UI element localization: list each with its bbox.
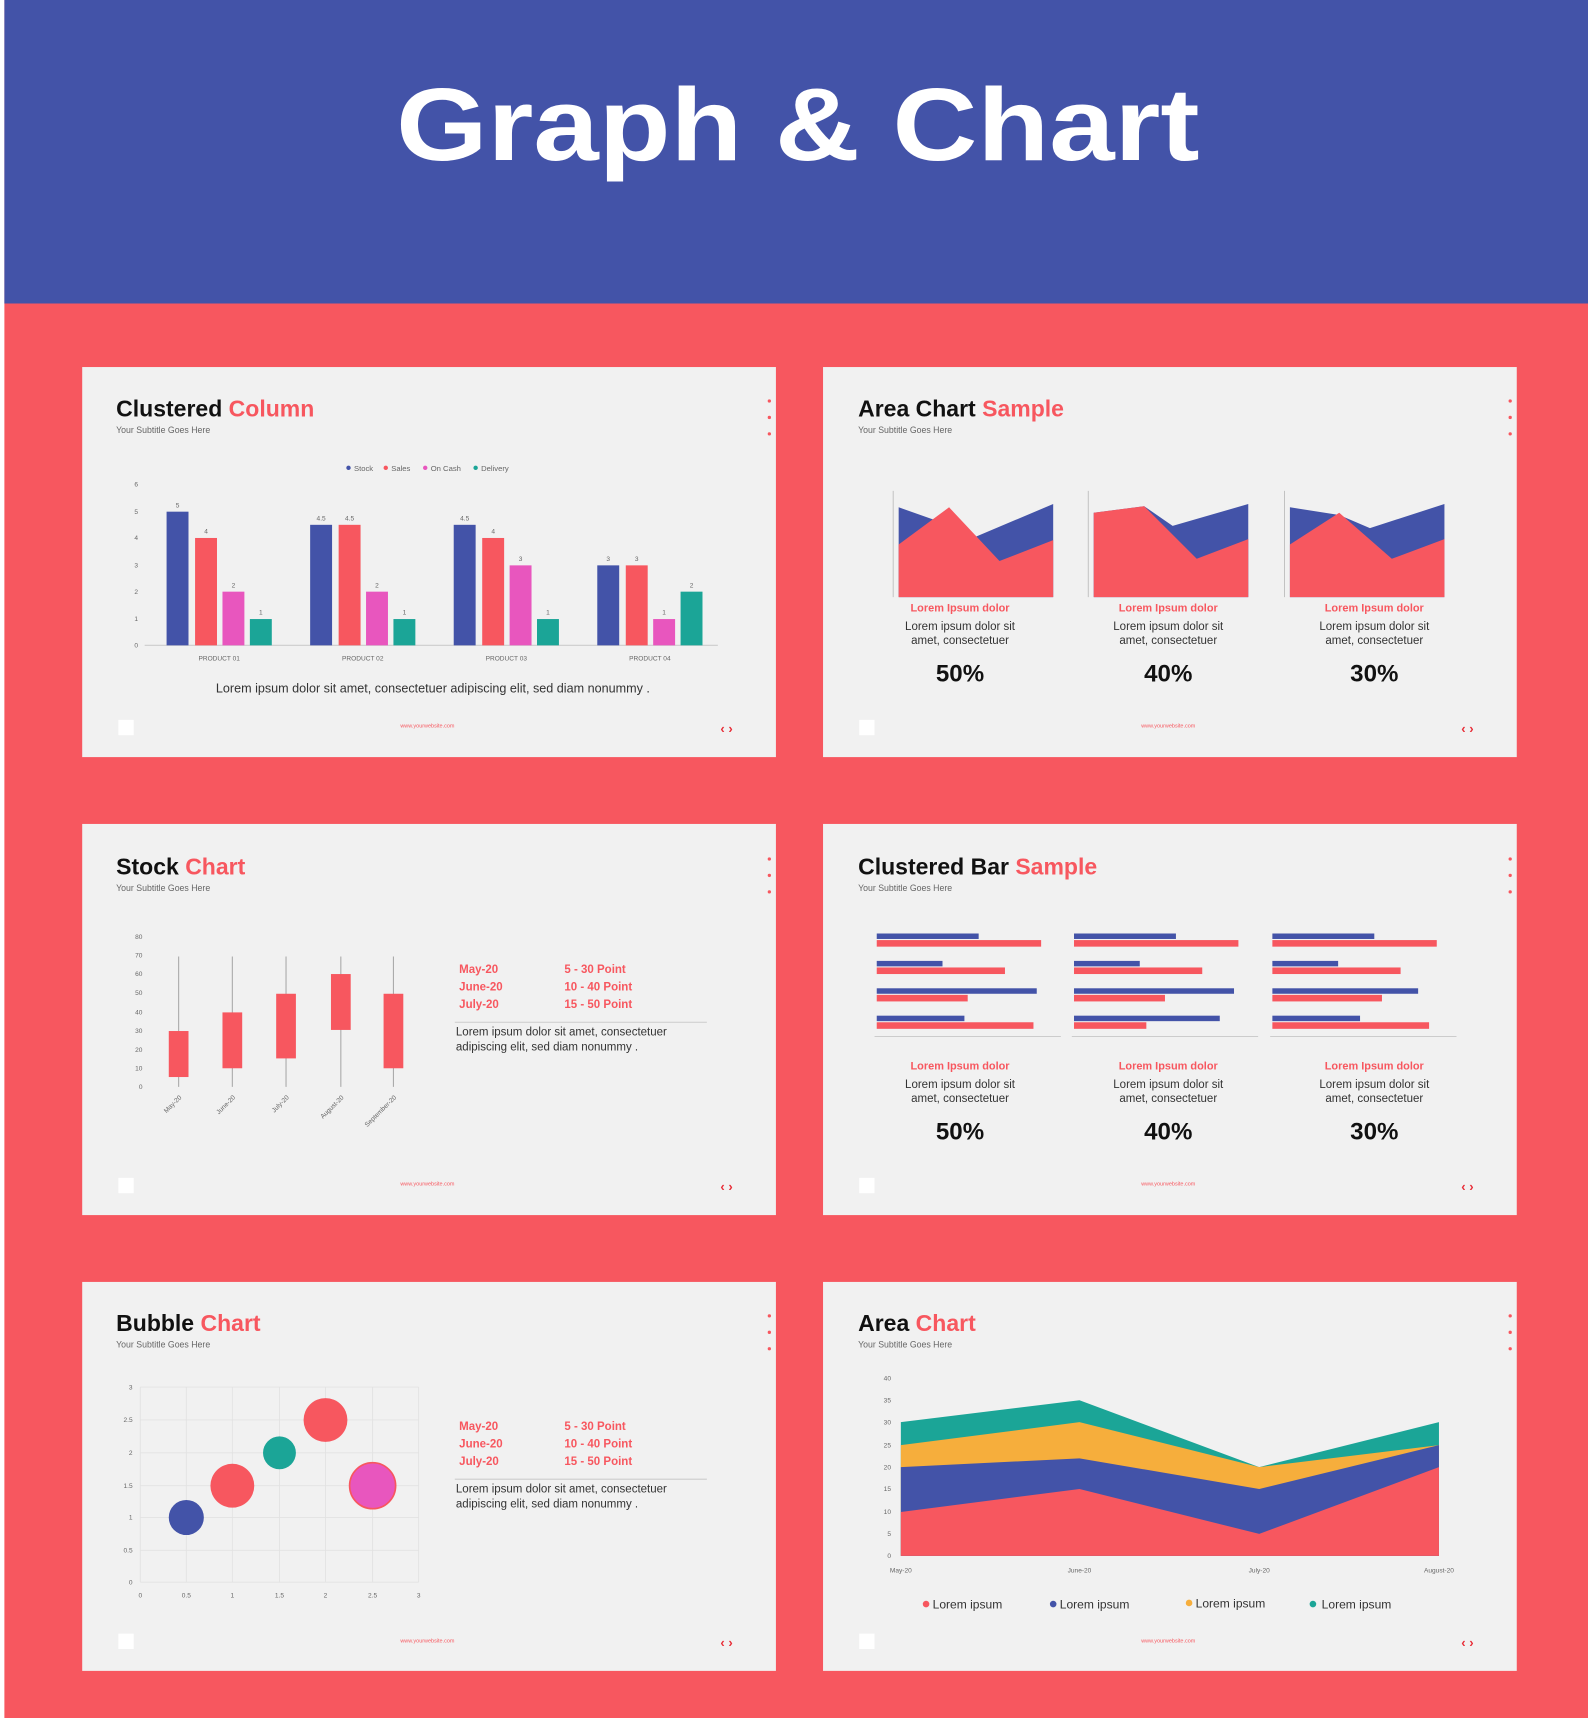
stats: amet, consectetuer (911, 635, 1009, 647)
bar chart: 5 (176, 502, 180, 509)
footer: www.yourwebsite.com (399, 1182, 455, 1188)
panel: bubble chart: Your Subtitle Goes Here (116, 1340, 210, 1350)
stacked area chart: 30 (884, 1419, 891, 1426)
heading: Clustered Column (116, 395, 314, 421)
candlestick chart: 80 (135, 934, 143, 941)
stacked area chart: 35 (884, 1397, 891, 1404)
bubble plot: 2 (129, 1450, 133, 1457)
bubble plot: 1 (129, 1515, 133, 1522)
data notes: 15 - 50 Point (564, 999, 632, 1011)
candlestick chart: 0 (139, 1084, 143, 1091)
stacked area chart: 40 (884, 1376, 891, 1383)
bar charts (875, 934, 1456, 1036)
stats: Lorem Ipsum dolor (1119, 602, 1219, 614)
stacked area chart: May-20 (890, 1567, 912, 1574)
footer: www.yourwebsite.com (1140, 1638, 1196, 1644)
data notes: July-20 (459, 1456, 499, 1468)
data notes: June-20 (459, 1438, 503, 1450)
candlestick chart: 60 (135, 971, 143, 978)
stats: amet, consectetuer (1325, 635, 1423, 647)
data notes (459, 964, 632, 1011)
legend: Lorem ipsum (1060, 1597, 1129, 1611)
stats: amet, consectetuer (1119, 1093, 1217, 1105)
stats (905, 1060, 1430, 1145)
data notes: 10 - 40 Point (564, 981, 632, 993)
description: Lorem ipsum dolor sit amet, consectetuer (456, 1026, 667, 1038)
bar chart: 1 (134, 616, 138, 623)
stats: Lorem ipsum dolor sit (905, 621, 1016, 633)
candlestick chart: 50 (135, 990, 143, 997)
description: adipiscing elit, sed diam nonummy . (456, 1499, 638, 1511)
bubble plot: 3 (129, 1384, 133, 1391)
candlestick chart: June-20 (215, 1094, 237, 1116)
legend: Lorem ipsum (1196, 1596, 1265, 1610)
bubble plot: 1.5 (275, 1592, 284, 1599)
bar chart (134, 481, 718, 663)
bar chart: 3 (519, 556, 523, 563)
data notes: May-20 (459, 964, 498, 976)
bar chart: 2 (134, 589, 138, 596)
mini area charts (893, 491, 1444, 597)
heading: Clustered Bar Sample (858, 853, 1097, 879)
bubble plot: 2.5 (123, 1417, 133, 1424)
legend: Sales (391, 464, 411, 473)
bar chart: 4 (204, 529, 208, 536)
stats: Lorem Ipsum dolor (910, 602, 1010, 614)
footer (859, 399, 1512, 736)
data notes: June-20 (459, 981, 503, 993)
data notes: 10 - 40 Point (564, 1438, 632, 1450)
footer: www.yourwebsite.com (399, 1638, 455, 1644)
candlestick chart: 20 (135, 1047, 143, 1054)
footer: ‹ › (1461, 1179, 1474, 1194)
footer (859, 1314, 1512, 1650)
footer: www.yourwebsite.com (1140, 1182, 1196, 1188)
stats: 50% (936, 1118, 984, 1145)
bar chart: PRODUCT 02 (342, 656, 384, 663)
panel: clustered bar sample: Your Subtitle Goes Here (858, 883, 952, 893)
description: Lorem ipsum dolor sit amet, consectetuer (456, 1483, 667, 1495)
bar chart: PRODUCT 03 (486, 656, 527, 663)
stats: amet, consectetuer (911, 1093, 1009, 1105)
stats: 30% (1350, 1118, 1398, 1145)
stats: Lorem ipsum dolor sit (1113, 621, 1224, 633)
caption: Lorem ipsum dolor sit amet, consectetuer adipiscing elit, sed diam nonummy . (216, 681, 650, 695)
bar chart: PRODUCT 01 (198, 656, 240, 663)
candlestick chart: July-20 (271, 1094, 291, 1114)
candlestick chart (135, 934, 403, 1129)
stats: 40% (1144, 1118, 1192, 1145)
stats: amet, consectetuer (1119, 635, 1217, 647)
stats: amet, consectetuer (1325, 1093, 1423, 1105)
footer (118, 857, 771, 1194)
bar chart: 4 (134, 535, 138, 542)
bubble plot: 3 (417, 1592, 421, 1599)
bubble plot: 2.5 (368, 1592, 378, 1599)
heading: Stock Chart (116, 853, 246, 879)
legend: On Cash (431, 464, 461, 473)
panel: clustered bar sample (823, 824, 1517, 1215)
bar chart: 5 (134, 509, 138, 516)
footer (118, 399, 771, 736)
header banner (4, 0, 1588, 303)
panel: area chart: Your Subtitle Goes Here (858, 1340, 952, 1350)
bar chart: 0 (134, 643, 138, 650)
title: Graph & Chart (396, 67, 1199, 182)
stats: Lorem Ipsum dolor (910, 1060, 1010, 1072)
footer: ‹ › (720, 721, 733, 736)
stats: Lorem ipsum dolor sit (1113, 1079, 1224, 1091)
data notes: 5 - 30 Point (564, 1421, 626, 1433)
stats: Lorem ipsum dolor sit (1319, 621, 1430, 633)
legend: Lorem ipsum (933, 1597, 1002, 1611)
bubble plot: 0 (138, 1592, 142, 1599)
stats: Lorem Ipsum dolor (1325, 1060, 1425, 1072)
stacked area chart: 15 (884, 1486, 891, 1493)
stats: 50% (936, 661, 984, 688)
footer: www.yourwebsite.com (1140, 724, 1196, 730)
bubble plot: 2 (324, 1592, 328, 1599)
legend: Lorem ipsum (1322, 1597, 1391, 1611)
legend (923, 1596, 1391, 1611)
footer: www.yourwebsite.com (399, 724, 455, 730)
heading: Area Chart (858, 1310, 976, 1336)
candlestick chart: 70 (135, 953, 143, 960)
bar chart: 2 (375, 582, 379, 589)
bubble plot: 1.5 (123, 1483, 133, 1490)
legend: Stock (354, 464, 373, 473)
bubble plot: 1 (231, 1592, 235, 1599)
candlestick chart: 30 (135, 1028, 143, 1035)
footer: ‹ › (1461, 721, 1474, 736)
data notes: May-20 (459, 1421, 498, 1433)
bar chart: 4.5 (345, 515, 355, 522)
panel: stock chart: Your Subtitle Goes Here (116, 883, 210, 893)
stacked area chart (884, 1376, 1454, 1574)
data notes (459, 1421, 632, 1468)
panel: bubble chart (82, 1282, 776, 1671)
candlestick chart: 40 (135, 1010, 143, 1017)
panel: clustered column (82, 367, 776, 757)
bar chart: 1 (259, 610, 263, 617)
bar chart: 6 (134, 481, 138, 488)
panel: clustered column: Your Subtitle Goes Here (116, 425, 210, 435)
candlestick chart: August-20 (319, 1094, 346, 1120)
stats: Lorem ipsum dolor sit (905, 1079, 1016, 1091)
footer: ‹ › (1461, 1635, 1474, 1650)
data notes: 5 - 30 Point (564, 964, 626, 976)
panel: area chart (823, 1282, 1517, 1671)
bar chart: 1 (546, 610, 550, 617)
bar chart: 1 (403, 610, 407, 617)
panel: stock chart (82, 824, 776, 1215)
description (456, 1026, 667, 1054)
bar chart: 4.5 (460, 515, 470, 522)
footer (859, 857, 1512, 1194)
stats: 30% (1350, 661, 1398, 688)
panel: area chart sample (823, 367, 1517, 757)
footer: ‹ › (720, 1635, 733, 1650)
bar chart: PRODUCT 04 (629, 656, 671, 663)
bubble plot: 0 (129, 1579, 133, 1586)
bar chart: 2 (232, 582, 236, 589)
description: adipiscing elit, sed diam nonummy . (456, 1042, 638, 1054)
stacked area chart: August-20 (1424, 1567, 1454, 1574)
bubble plot (123, 1384, 421, 1599)
footer: ‹ › (720, 1179, 733, 1194)
candlestick chart: 10 (135, 1065, 143, 1072)
bar chart: 3 (134, 563, 138, 570)
stacked area chart: July-20 (1249, 1567, 1270, 1574)
bar chart: 3 (635, 556, 639, 563)
bubble plot: 0.5 (182, 1592, 191, 1599)
stacked area chart: 25 (884, 1442, 891, 1449)
heading: Area Chart Sample (858, 395, 1064, 421)
data notes: July-20 (459, 999, 499, 1011)
bar chart: 4.5 (317, 515, 326, 522)
data notes: 15 - 50 Point (564, 1456, 632, 1468)
panel: area chart sample: Your Subtitle Goes Here (858, 425, 952, 435)
legend (346, 464, 509, 473)
stats: Lorem Ipsum dolor (1325, 602, 1425, 614)
footer (118, 1314, 771, 1650)
candlestick chart: September-20 (364, 1094, 398, 1129)
bar chart: 2 (690, 582, 694, 589)
heading: Bubble Chart (116, 1310, 261, 1336)
stats: 40% (1144, 661, 1192, 688)
description (456, 1483, 667, 1511)
bar chart: 3 (606, 556, 610, 563)
stacked area chart: 20 (884, 1464, 891, 1471)
stats: Lorem Ipsum dolor (1119, 1060, 1219, 1072)
stacked area chart: 10 (884, 1509, 891, 1516)
stacked area chart: 5 (887, 1531, 891, 1538)
stacked area chart: 0 (887, 1553, 891, 1560)
stats (905, 602, 1430, 688)
stats: Lorem ipsum dolor sit (1319, 1079, 1430, 1091)
stacked area chart: June-20 (1068, 1567, 1092, 1574)
legend: Delivery (481, 464, 509, 473)
bar chart: 1 (662, 610, 666, 617)
bubble plot: 0.5 (123, 1548, 133, 1555)
bar chart: 4 (491, 529, 495, 536)
candlestick chart: May-20 (163, 1094, 184, 1115)
